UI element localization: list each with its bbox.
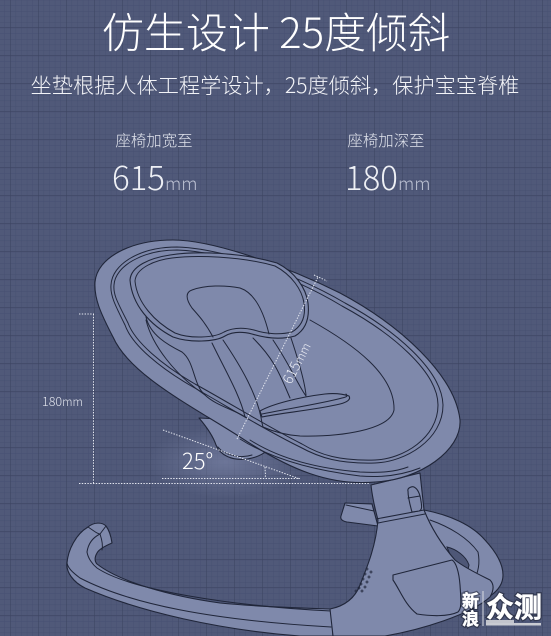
angle marker: 25 degrees xyxy=(162,430,300,479)
watermark zhongce: 众测 xyxy=(486,586,542,626)
height label: 180mm xyxy=(42,391,83,410)
glow behind angle xyxy=(147,426,303,498)
speaker dots xyxy=(355,568,372,592)
crotch strap xyxy=(260,394,350,417)
illustration: swing base and stand xyxy=(67,473,503,636)
watermark xyxy=(462,586,542,630)
dimension: height 180mm xyxy=(42,314,94,483)
title: 仿生设计 25度倾斜 xyxy=(102,0,450,61)
watermark shadow: 新 xyxy=(462,587,479,612)
back arm of base xyxy=(424,510,503,600)
stem collar xyxy=(376,510,425,523)
pocket panel xyxy=(393,560,461,616)
stat value: 180mm: 180mm xyxy=(345,152,431,200)
seat inner rim lines xyxy=(111,247,443,463)
seat front lip xyxy=(240,439,420,477)
stat label: depth: 座椅加深至 xyxy=(348,129,424,151)
watermark shadow: 浪 xyxy=(462,605,479,630)
angle label: 25° xyxy=(182,444,213,476)
head cushion xyxy=(187,286,269,337)
dimension: seat width 615mm xyxy=(237,275,327,439)
watermark shadow: 众测 xyxy=(486,586,542,626)
stat value: 615mm: 615mm xyxy=(112,152,198,200)
stat label: width: 座椅加宽至 xyxy=(116,129,192,151)
illustration: reclined seat xyxy=(95,240,460,483)
seat outer shell xyxy=(95,240,460,483)
watermark sina: 新 xyxy=(462,587,479,612)
watermark: 浪 xyxy=(462,605,479,630)
seat basin line xyxy=(263,320,394,436)
ground dashed line xyxy=(79,482,370,484)
stem knob xyxy=(408,487,422,512)
width label: 615mm xyxy=(278,339,316,387)
headrest dish xyxy=(130,253,308,341)
subtitle: 坐垫根据人体工程学设计，25度倾斜，保护宝宝脊椎 xyxy=(31,69,519,100)
curved base rail xyxy=(67,523,333,636)
stat: seat depth xyxy=(345,129,431,200)
harness and body lines xyxy=(146,317,247,418)
illustration: seat pivot underneath xyxy=(199,418,268,459)
stat: seat width xyxy=(112,129,198,200)
dashed height line xyxy=(79,314,94,483)
dashed width line xyxy=(237,275,327,439)
main body xyxy=(330,473,493,636)
watermark shadow xyxy=(462,586,542,630)
pedal xyxy=(341,503,378,526)
angle lines xyxy=(162,430,300,479)
